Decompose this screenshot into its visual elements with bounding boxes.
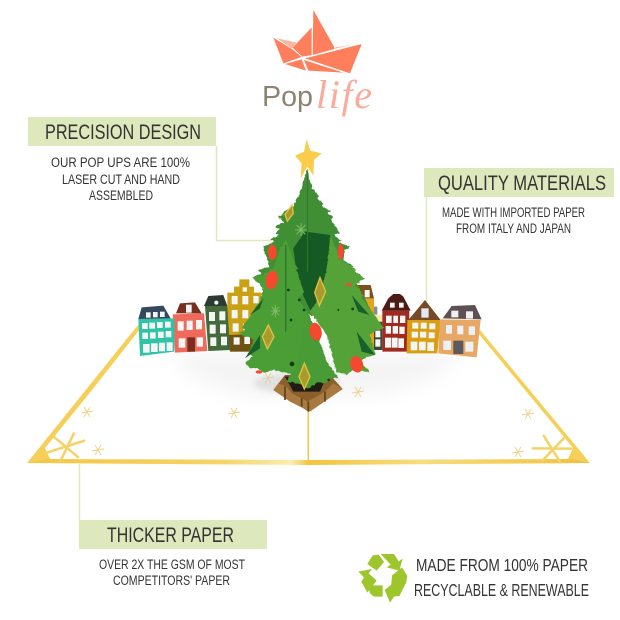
text: thicker paper body bbox=[99, 557, 245, 588]
house: dark red bbox=[382, 294, 411, 352]
house: small dark green bbox=[374, 322, 382, 350]
christmas tree bbox=[238, 139, 384, 412]
tree shadow bbox=[253, 373, 340, 393]
gold border left bbox=[27, 325, 140, 463]
text: thicker paper body: COMPETITORS' PAPER bbox=[113, 573, 230, 588]
logo: Poplife bbox=[262, 10, 372, 117]
heading: precision design bbox=[28, 117, 216, 146]
text: recycled paper statement bbox=[414, 555, 589, 600]
logo word: life: life bbox=[316, 72, 372, 117]
dark tree interior bbox=[293, 232, 330, 313]
gold border bottom bbox=[27, 459, 590, 465]
gold border right bbox=[478, 330, 590, 463]
card page bbox=[27, 325, 590, 463]
small snowflakes bbox=[81, 373, 534, 457]
panel: precision design bbox=[28, 117, 216, 203]
houses right row bbox=[355, 285, 482, 357]
tree pot bbox=[273, 375, 343, 412]
house: brown roof mustard bbox=[407, 300, 441, 353]
icon: origami paper boat bbox=[273, 10, 362, 73]
soft shadow under houses bbox=[170, 352, 460, 395]
right front tree bbox=[310, 237, 384, 374]
dark notch shapes bbox=[245, 295, 375, 358]
leader line: thicker paper bbox=[78, 464, 80, 520]
text: precision design body: LASER CUT AND HAND bbox=[62, 172, 180, 187]
house: mustard stepped gable bbox=[227, 279, 262, 352]
corner snowflake right bbox=[531, 434, 572, 465]
ornaments gold diamonds bbox=[262, 205, 326, 389]
panel: thicker paper bbox=[79, 520, 267, 588]
panel: quality materials bbox=[424, 168, 614, 236]
center front tree bbox=[287, 315, 338, 389]
icon: recycling arrows bbox=[358, 554, 407, 603]
left tree fold bbox=[284, 245, 287, 332]
corner snowflake left bbox=[45, 432, 87, 463]
houses left row bbox=[138, 279, 262, 356]
ornaments red bbox=[256, 244, 365, 374]
pop-up card base bbox=[27, 325, 590, 465]
text: precision design body: ASSEMBLED bbox=[89, 188, 153, 203]
house: orange with grey roof bbox=[438, 305, 482, 357]
text: quality materials body bbox=[442, 205, 585, 236]
house: teal bbox=[138, 306, 174, 356]
back tree layer bbox=[254, 168, 370, 322]
heading: thicker paper bbox=[79, 520, 267, 549]
text: precision design body bbox=[51, 155, 190, 203]
text: thicker paper body: OVER 2X THE GSM OF MOST bbox=[99, 557, 245, 572]
house: dark green bbox=[204, 295, 230, 351]
star cutouts bbox=[271, 223, 307, 317]
black dot cutouts bbox=[287, 289, 354, 381]
star bbox=[295, 139, 322, 178]
leader line: precision design bbox=[216, 146, 272, 240]
text: quality materials body: FROM ITALY AND JAPAN bbox=[456, 221, 571, 236]
leader line: quality materials bbox=[426, 197, 428, 302]
left front tree bbox=[238, 240, 317, 375]
house: golden behind tree bbox=[355, 285, 382, 350]
logo word: Pop: Pop bbox=[262, 81, 313, 113]
text: precision design body: OUR POP UPS ARE 100% bbox=[51, 155, 190, 170]
back tree centre fold bbox=[306, 172, 309, 272]
heading: thicker paper: THICKER PAPER bbox=[107, 524, 234, 547]
house: coral red bbox=[173, 302, 207, 353]
center fold bbox=[308, 405, 309, 463]
heading: precision design: PRECISION DESIGN bbox=[45, 121, 201, 144]
